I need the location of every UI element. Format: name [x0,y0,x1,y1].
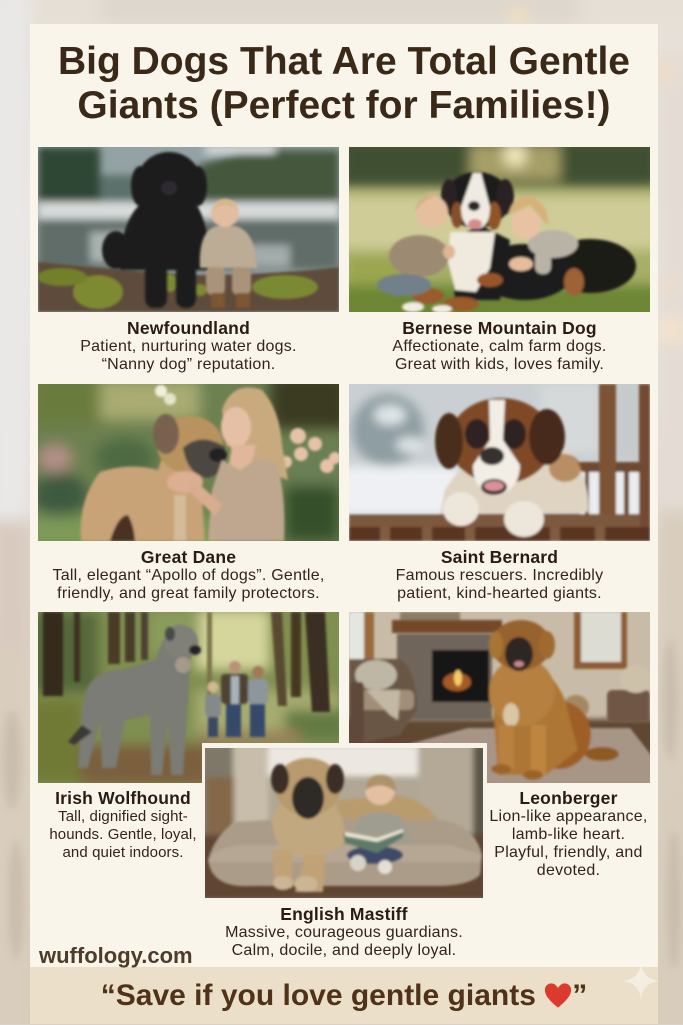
photo: Leonberger in living room [349,612,650,783]
photo: English Mastiff with toddler reading on a dog bed [202,743,487,898]
caption: Bernese Mountain Dog: Bernese Mountain Dog [402,318,597,338]
caption: English Mastiff: Massive, courageous guardians. [225,924,463,940]
photo: Great Dane with woman in garden [38,384,339,541]
bottom banner: “Save if you love gentle giants ” [101,979,587,1012]
caption: English Mastiff: Calm, docile, and deeply loyal. [232,942,456,959]
caption: Bernese Mountain Dog: Great with kids, loves family. [395,356,604,373]
caption: Saint Bernard [396,547,604,602]
caption: Irish Wolfhound [49,788,197,861]
title: Big Dogs That Are Total Gentle [58,40,630,83]
photo: Newfoundland with toddler on a mossy log [38,147,339,312]
caption: Saint Bernard: Saint Bernard [441,547,558,567]
caption: Bernese Mountain Dog: Affectionate, calm farm dogs. [392,338,607,354]
photo: Saint Bernard on snowy porch [349,384,650,541]
caption: Newfoundland: “Nanny dog” reputation. [102,356,275,373]
caption: Newfoundland: Patient, nurturing water dogs. [80,338,297,354]
caption: Bernese Mountain Dog [392,318,607,373]
caption: Great Dane: Tall, elegant “Apollo of dogs”. Gentle, [52,566,325,584]
caption: Saint Bernard: Famous rescuers. Incredibly [396,566,603,584]
caption: Leonberger: lamb-like heart. [512,826,625,843]
caption: English Mastiff: English Mastiff [280,904,408,924]
caption: Leonberger: Playful, friendly, and [494,844,643,861]
caption: Newfoundland: Newfoundland [127,318,250,338]
title: Giants (Perfect for Families!) [77,84,611,127]
caption: Leonberger: devoted. [537,862,600,879]
caption: Irish Wolfhound: Tall, dignified sight- [58,808,188,824]
caption: Great Dane: friendly, and great family protectors. [57,585,320,602]
caption: Irish Wolfhound: Irish Wolfhound [55,788,191,808]
caption: Leonberger: Lion-like appearance, [489,808,648,824]
sparkle [624,966,658,998]
bottom banner [30,967,658,1024]
caption: Newfoundland [80,318,297,373]
caption: English Mastiff [225,904,463,959]
caption: Leonberger [489,788,648,879]
photo: Irish Wolfhound in forest with family [38,612,339,783]
caption: Great Dane: Great Dane [141,547,236,567]
caption: Saint Bernard: patient, kind-hearted giants. [397,585,602,602]
caption: Irish Wolfhound: hounds. Gentle, loyal, [49,826,197,843]
title [58,40,630,127]
caption: Great Dane [52,547,325,602]
caption: Leonberger: Leonberger [519,788,618,808]
photo: Bernese Mountain Dog with two children in a meadow [349,147,650,312]
caption: Irish Wolfhound: and quiet indoors. [62,844,184,861]
website credit: wuffology.com [39,943,193,968]
